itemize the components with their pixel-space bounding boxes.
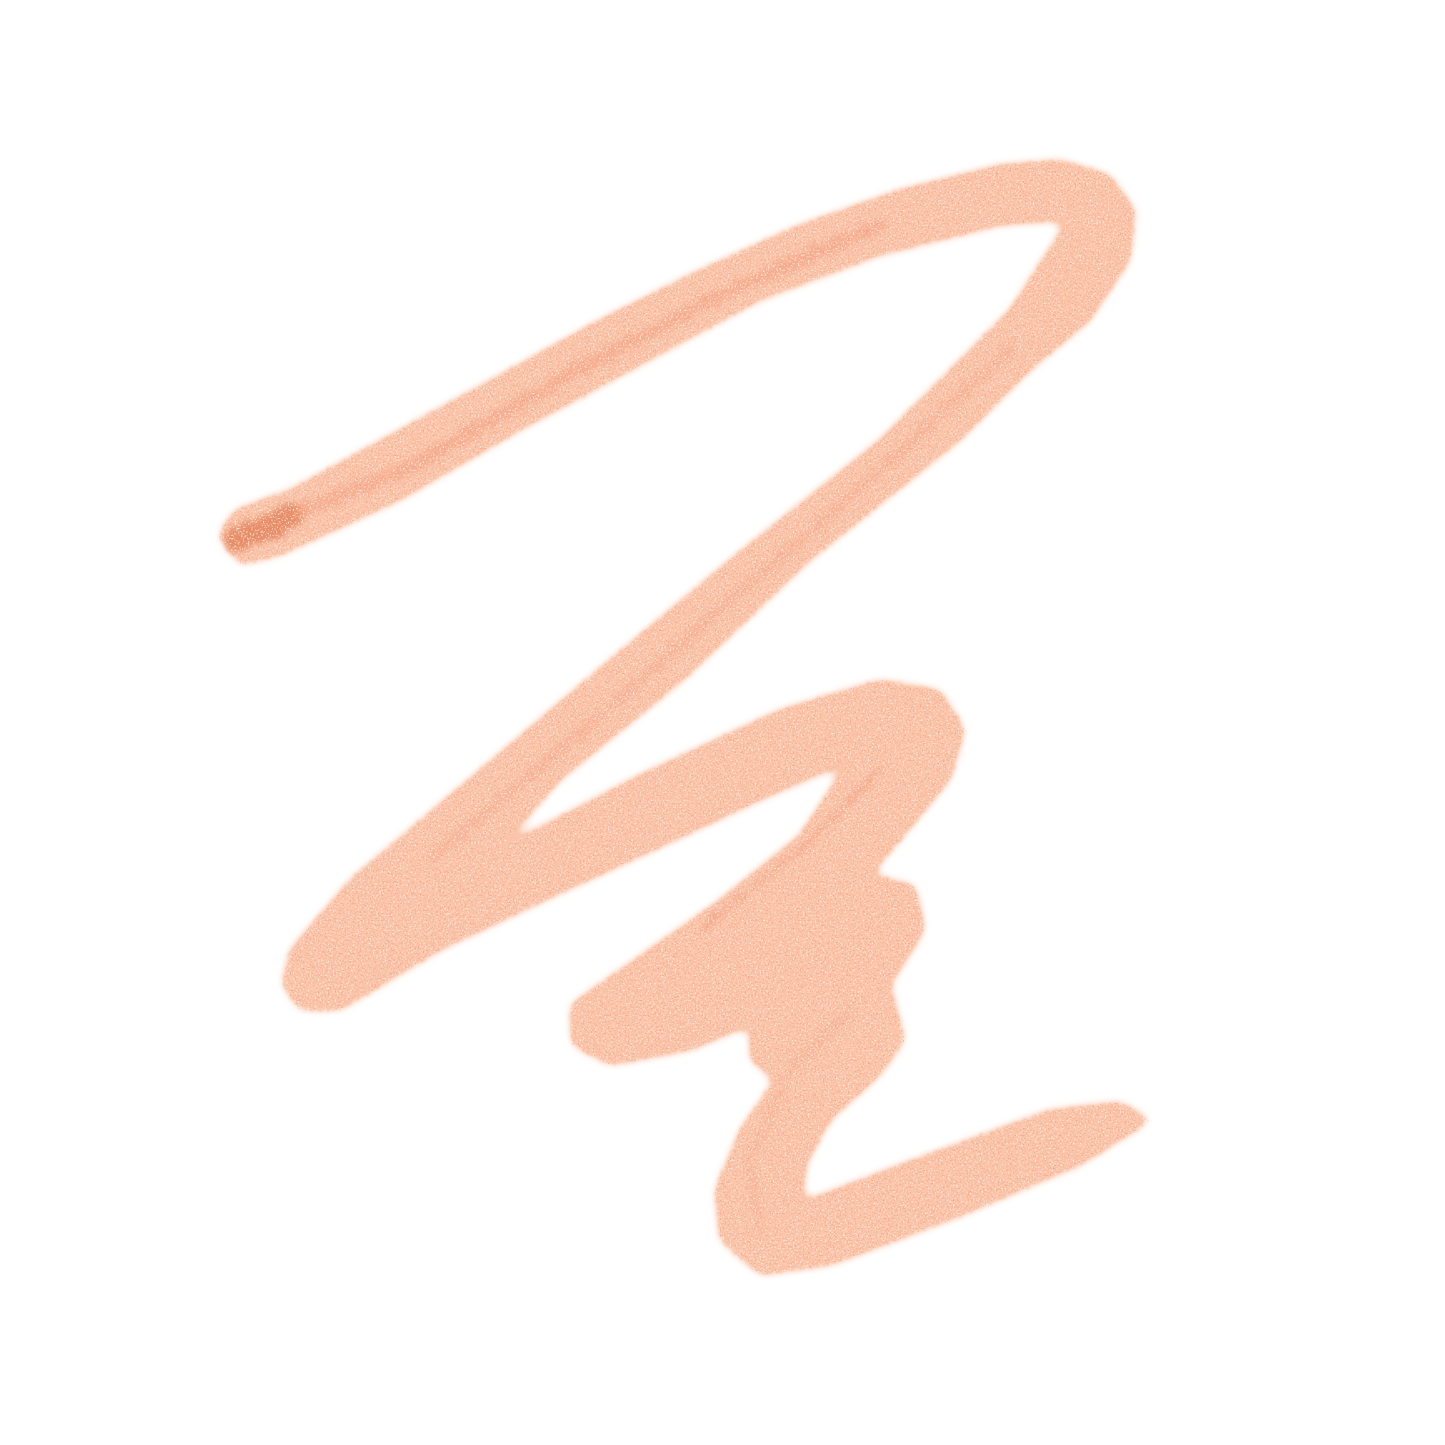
third stroke streak — [700, 770, 880, 930]
dark glitter — [218, 160, 1152, 1275]
lip liner scribble stroke — [218, 160, 1152, 1275]
first stroke streak — [300, 225, 880, 512]
darker pigment streaks — [238, 225, 1010, 1230]
shimmer speckles — [218, 160, 1152, 1275]
down stroke streak — [430, 350, 1010, 860]
lower stroke streak — [750, 1010, 850, 1230]
soft pale halo around the stroke — [218, 160, 1152, 1275]
start of stroke, saturated tip — [238, 516, 290, 540]
pale glitter — [218, 160, 1152, 1275]
